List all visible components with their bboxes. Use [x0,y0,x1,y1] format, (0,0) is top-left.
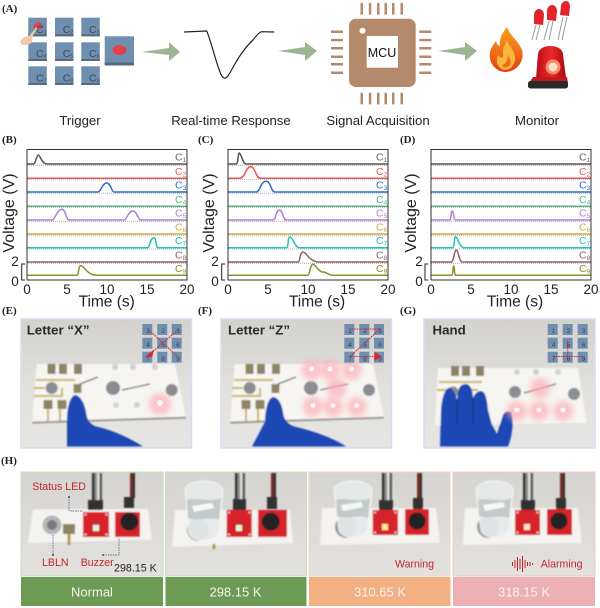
channel labels: C [579,235,587,247]
status bar: 318.15 K [453,577,595,606]
channel labels: 9 [587,268,591,275]
channel labels: 9 [183,268,187,275]
plot frame [228,150,388,280]
channel labels: C [376,194,384,206]
channel labels: C [175,180,183,192]
channel labels: C [579,166,587,178]
x axis ticks: 20 [583,282,599,297]
y axis title: Voltage (V) [201,173,218,253]
x axis ticks: 15 [139,282,155,297]
channel labels: C [376,250,384,262]
x axis title: Time (s) [289,294,345,311]
arrow 1 [142,42,180,61]
channel labels [579,152,591,275]
channel labels: C [376,208,384,220]
channel labels: C [579,152,587,164]
callout: Buzzer [81,538,119,569]
trigger sensor grid: C [63,24,70,36]
gesture inset: 3 [176,328,180,335]
panel B: letter X voltage traces [1,134,195,311]
scale bar: 0 [415,274,423,289]
gesture inset: 7 [146,356,150,363]
channel labels: 4 [183,199,187,206]
caption: Monitor: Monitor [515,113,560,128]
channel labels [175,152,187,275]
scale bar: 2 [415,254,423,269]
x axis ticks: 20 [380,282,396,297]
arrow 2 [278,42,317,61]
column: 310.65 K [309,472,450,606]
title Letter Z: Letter “Z” [228,322,290,337]
trigger sensor grid: C [36,72,44,84]
column: 318.15 K [453,472,595,606]
trigger sensor grid: C [63,48,70,60]
column: Normal [21,472,163,606]
channel labels: 4 [384,199,388,206]
gesture inset: 5 [567,342,571,349]
icon: pointing hand [20,27,38,45]
photo frame [21,319,192,448]
trigger sensor grid: 3 [97,30,100,36]
channel labels: C [175,250,183,262]
channel labels: 4 [587,199,591,206]
channel labels: C [175,152,183,164]
trigger sensor grid: 1 [44,30,47,36]
device board and glove [435,366,587,446]
channel labels: C [175,235,183,247]
scale bar: 2 [211,254,219,269]
status bar: 310.65 K: 310.65 K [354,585,406,600]
scale bar: 2 [11,254,19,269]
channel labels: 1 [587,157,591,164]
x axis title: Time (s) [79,294,135,311]
x axis ticks: 15 [543,282,559,297]
callout: Buzzer: Buzzer [81,557,114,569]
enlarged sensor [105,36,134,66]
arrow 3 [438,42,477,61]
scale bar [211,254,225,289]
callout: Status LED: Status LED [32,481,86,493]
icon: red LEDs [532,1,570,40]
callout: Alarming: Alarming [541,559,583,571]
caption: Signal Acquisition: Signal Acquisition [326,113,430,128]
warning photo [309,472,450,576]
status bar: 310.65 K [309,577,450,606]
gesture inset: 3 [378,328,382,335]
gesture inset: 7 [552,356,556,363]
x axis title: Time (s) [487,294,543,311]
column: 298.15 K [166,472,306,606]
gesture inset: 1 [552,328,556,335]
dotted baselines [228,165,388,263]
channel labels: C [175,166,183,178]
LED glows [302,360,367,417]
scale bar: 0 [211,274,219,289]
normal photo [21,472,163,576]
channel labels: 2 [587,171,591,178]
channel labels: 7 [384,241,388,248]
callout: LBLN: LBLN [42,557,68,569]
trigger sensor grid: C [89,48,97,60]
status bar: 298.15 K: 298.15 K [209,585,262,600]
response curve [184,31,274,78]
gesture inset: 4 [552,342,556,349]
gesture inset [142,324,182,363]
panel C: letter Z voltage traces [198,134,396,311]
y axis title: Voltage (V) [1,173,18,253]
channel labels: 8 [587,255,591,262]
plot frame [431,150,591,280]
x axis ticks: 5 [264,282,272,297]
channel labels: 3 [384,185,388,192]
x axis ticks [427,282,599,297]
alarming photo [453,472,595,576]
caption: Real-time Response: Real-time Response [171,113,291,128]
gesture inset: 6 [176,342,180,349]
gesture inset: 8 [161,356,165,363]
channel labels: C [579,222,587,234]
channel labels: 8 [384,255,388,262]
gesture inset [548,324,588,363]
gesture inset: 7 [348,356,352,363]
gesture inset: 9 [582,356,586,363]
trigger sensor grid: 7 [44,78,47,84]
trigger sensor grid: 4 [44,54,47,60]
trigger sensor grid: 8 [70,78,73,84]
channel labels: C [579,180,587,192]
plot frame [27,150,187,280]
channel labels: C [175,208,183,220]
channel labels: 2 [384,171,388,178]
x axis ticks: 0 [224,282,232,297]
x axis ticks: 0 [427,282,435,297]
x axis ticks [224,282,396,297]
channel labels: C [579,263,587,275]
device board and glove [230,364,384,446]
channel labels: 7 [587,241,591,248]
x axis ticks: 5 [63,282,71,297]
channel labels: 1 [183,157,187,164]
channel labels: 7 [183,241,187,248]
x axis ticks: 10 [99,282,115,297]
channel labels: C [175,194,183,206]
channel labels: 6 [384,227,388,234]
scale bar [415,254,428,289]
trigger sensor grid [28,18,100,85]
channel labels: C [175,222,183,234]
label G: (G) [400,305,416,317]
channel labels: C [376,152,384,164]
trigger sensor grid: 2 [70,30,73,36]
channel labels: 5 [384,213,388,220]
channel labels: 6 [587,227,591,234]
icon: alarm beacon [528,46,568,88]
LED glow [149,393,171,415]
channel labels: 6 [183,227,187,234]
gesture inset: 4 [348,342,352,349]
callout: Warning: Warning [395,559,434,571]
caption: Trigger: Trigger [59,113,101,128]
label H: (H) [1,455,17,467]
gesture inset: 8 [363,356,367,363]
gesture inset: 5 [161,342,165,349]
trigger sensor grid: 6 [97,54,100,60]
channel labels: C [376,222,384,234]
plot traces [228,153,388,275]
trigger sensor grid: C [89,72,97,84]
channel labels: C [376,180,384,192]
gesture inset: 4 [146,342,150,349]
callout: LBLN [42,535,68,569]
LED glows [507,378,573,421]
callout: Status LED [32,481,86,511]
panel D: hand voltage traces [400,134,599,311]
channel labels: C [175,263,183,275]
scale bar: 0 [11,274,19,289]
gesture inset: 9 [378,356,382,363]
y axis title: Voltage (V) [403,173,420,253]
channel labels: 5 [183,213,187,220]
label F: (F) [198,305,212,317]
x axis ticks: 20 [179,282,195,297]
trigger sensor grid: C [36,24,44,36]
channel labels: 8 [183,255,187,262]
channel labels: 1 [384,157,388,164]
gesture inset: 6 [582,342,586,349]
gesture inset: 2 [161,328,165,335]
temperature reading: 298.15 K [114,563,158,575]
channel labels: C [376,166,384,178]
plot traces [27,155,187,275]
MCU chip: MCU [368,46,396,60]
icon: sound wave [512,556,532,572]
x axis ticks: 10 [300,282,316,297]
x axis ticks: 5 [467,282,475,297]
status bar: 298.15 K [166,577,306,606]
gesture inset: 5 [363,342,367,349]
photo frame [424,319,595,448]
channel labels: C [579,250,587,262]
x axis ticks: 15 [340,282,356,297]
channel labels: C [579,194,587,206]
trigger sensor grid: 9 [97,78,100,84]
channel labels: C [376,235,384,247]
channel labels: 3 [183,185,187,192]
gesture inset: 1 [348,328,352,335]
title Hand: Hand [432,322,466,337]
trigger sensor grid: C [36,48,44,60]
x axis ticks: 10 [503,282,519,297]
status bar: 318.15 K: 318.15 K [498,585,550,600]
channel labels: 3 [587,185,591,192]
channel labels: 5 [587,213,591,220]
dotted baselines [431,165,591,263]
gesture inset: 6 [378,342,382,349]
status bar: Normal: Normal [71,585,113,600]
label E: (E) [2,305,17,317]
x axis ticks [23,282,195,297]
panel F: letter Z photo [198,305,392,448]
device board and glove [32,364,186,446]
gesture inset: 1 [146,328,150,335]
gesture inset: 3 [582,328,586,335]
MCU chip [331,3,431,104]
beaker photo [166,472,306,576]
gesture inset: 9 [176,356,180,363]
trigger sensor grid: 5 [70,54,73,60]
label D: (D) [400,134,416,146]
channel labels: C [579,208,587,220]
gesture inset [344,324,384,363]
panel E: letter X photo [2,305,192,448]
label A: (A) [2,3,18,15]
panel A: workflow [2,1,570,128]
plot traces [431,164,591,275]
title Letter X: Letter “X” [27,322,90,337]
trigger sensor grid: C [89,24,97,36]
status bar: Normal [21,577,163,606]
dotted baselines [27,165,187,263]
channel labels: 9 [384,268,388,275]
channel labels [376,152,388,275]
channel labels: 2 [183,171,187,178]
icon: flame [490,27,523,72]
photo frame [221,319,392,448]
panel H: temperature alarm sequence [1,455,595,606]
trigger sensor grid: C [63,72,70,84]
gesture inset: 2 [363,328,367,335]
scale bar [11,254,25,289]
x axis ticks: 0 [23,282,31,297]
label C: (C) [198,134,214,146]
gesture inset: 8 [567,356,571,363]
label B: (B) [2,134,17,146]
channel labels: C [376,263,384,275]
panel G: hand photo [400,305,595,448]
gesture inset: 2 [567,328,571,335]
